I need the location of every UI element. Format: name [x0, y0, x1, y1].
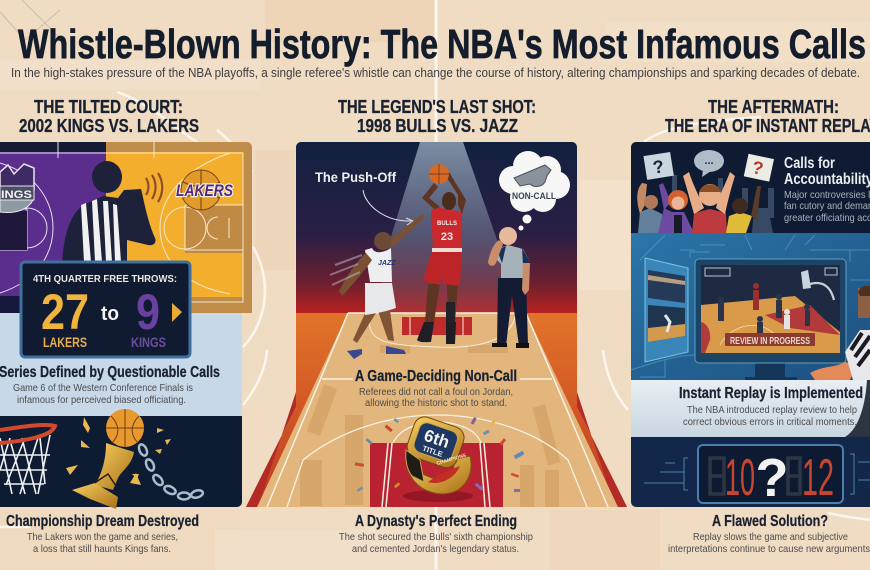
icon: referee at monitor [810, 286, 870, 380]
jazz defender [330, 214, 424, 359]
score box [21, 262, 190, 357]
text block: championship dream destroyed: The Lakers won the game and series, [27, 531, 178, 543]
column heading: legend's last shot [338, 97, 536, 136]
icon: Kings logo: INGS [1, 189, 32, 201]
light section: questionable calls: Series Defined by Questionable Calls [0, 364, 220, 381]
section: scoreboard [631, 437, 870, 508]
scoreboard display: ? [756, 448, 788, 508]
icon: referee blowing whistle [62, 161, 162, 263]
icon: championship ring: 6th [422, 426, 452, 452]
icon: Lakers logo [176, 170, 234, 210]
icon: Lakers logo: LAKERS [176, 181, 234, 200]
scoreboard display: 12 [802, 449, 834, 507]
panel: aftermath [631, 142, 870, 555]
column heading: tilted court [19, 97, 199, 136]
score box: to [101, 303, 119, 325]
text: calls for accountability [784, 155, 870, 224]
column heading: tilted court: 2002 KINGS VS. LAKERS [19, 116, 199, 136]
panel: legend's last shot [246, 142, 627, 555]
referee observing [488, 227, 530, 348]
column heading: legend's last shot: THE LEGEND'S LAST SHOT: [338, 97, 536, 117]
light section: questionable calls [0, 313, 242, 416]
jazz defender: JAZZ [378, 260, 396, 267]
person: yellow shirt woman [726, 186, 761, 233]
icon: championship ring: TITLE [421, 444, 444, 459]
split court illustration [0, 142, 252, 313]
icon: championship ring: CHAMPIONS [436, 453, 468, 467]
text block: dynasty [339, 513, 533, 555]
icon: main monitor [695, 259, 846, 380]
icon: side replay screens [645, 258, 688, 362]
person: left [637, 183, 664, 233]
text: calls for accountability: Calls for [784, 155, 835, 172]
person: orange-haired woman [658, 183, 694, 233]
jordan shooting [417, 164, 466, 344]
text block: flawed solution: A Flawed Solution? [712, 513, 828, 530]
panel: tilted court [0, 142, 252, 555]
column heading: aftermath [665, 97, 870, 136]
score box: KINGS [131, 335, 166, 350]
label: the push-off [315, 170, 413, 225]
column heading: legend's last shot: 1998 BULLS VS. JAZZ [357, 116, 518, 136]
text block: non-call: Referees did not call a foul on Jordan, [359, 386, 513, 398]
text block: non-call: allowing the historic shot to stand. [365, 397, 507, 409]
thought bubble: non-call: NON-CALL [512, 191, 556, 202]
icon: championship ring [355, 414, 524, 502]
scoreboard display [698, 445, 843, 508]
score box: 4TH QUARTER FREE THROWS: [33, 273, 177, 285]
score box: LAKERS [43, 335, 87, 350]
score box: 27 [41, 284, 89, 340]
section: crowd and accountability [631, 142, 870, 233]
icon: main monitor: REVIEW IN PROGRESS [730, 335, 810, 347]
light section: questionable calls: Game 6 of the Western Conference Finals is [13, 382, 193, 394]
text block: championship dream destroyed: a loss that still haunts Kings fans. [33, 543, 171, 555]
icon: protesting crowd [637, 150, 774, 233]
sign: left question: ? [651, 156, 665, 178]
text block: flawed solution: Replay slows the game and subjective [693, 531, 848, 543]
icon: shattered trophy [66, 409, 204, 509]
person: red shirt man [683, 172, 735, 233]
text block: dynasty: The shot secured the Bulls' sixth championship [339, 531, 533, 543]
arena backdrop [296, 142, 577, 313]
dark section: broken trophy and net [0, 409, 242, 509]
icon: Kings logo [0, 164, 34, 212]
light section: questionable calls: infamous for perceived biased officiating. [17, 394, 186, 406]
sign: right question: ? [750, 157, 765, 179]
jordan shooting: 23 [441, 231, 453, 243]
court floor [246, 313, 627, 507]
section: instant replay text [631, 380, 870, 437]
label: the push-off: The Push-Off [315, 170, 396, 185]
speech bubble: ... [704, 155, 714, 167]
text block: dynasty: and cemented Jordan's legendary status. [352, 543, 519, 555]
text block: championship dream destroyed: Championship Dream Destroyed [6, 513, 199, 530]
text block: non-call [355, 368, 517, 409]
text block: flawed solution [668, 513, 870, 555]
text block: championship dream destroyed [6, 513, 199, 555]
icon: basketball net [0, 425, 55, 494]
jordan shooting: BULLS [437, 221, 457, 227]
column heading: tilted court: THE TILTED COURT: [34, 97, 183, 117]
score box: 9 [136, 284, 160, 340]
text block: dynasty: A Dynasty's Perfect Ending [355, 513, 517, 530]
section: replay review monitor [631, 233, 870, 380]
column heading: aftermath: THE AFTERMATH: [708, 97, 839, 117]
text block: non-call: A Game-Deciding Non-Call [355, 368, 517, 385]
scoreboard display: 10 [725, 449, 755, 507]
thought bubble: non-call [499, 151, 570, 230]
